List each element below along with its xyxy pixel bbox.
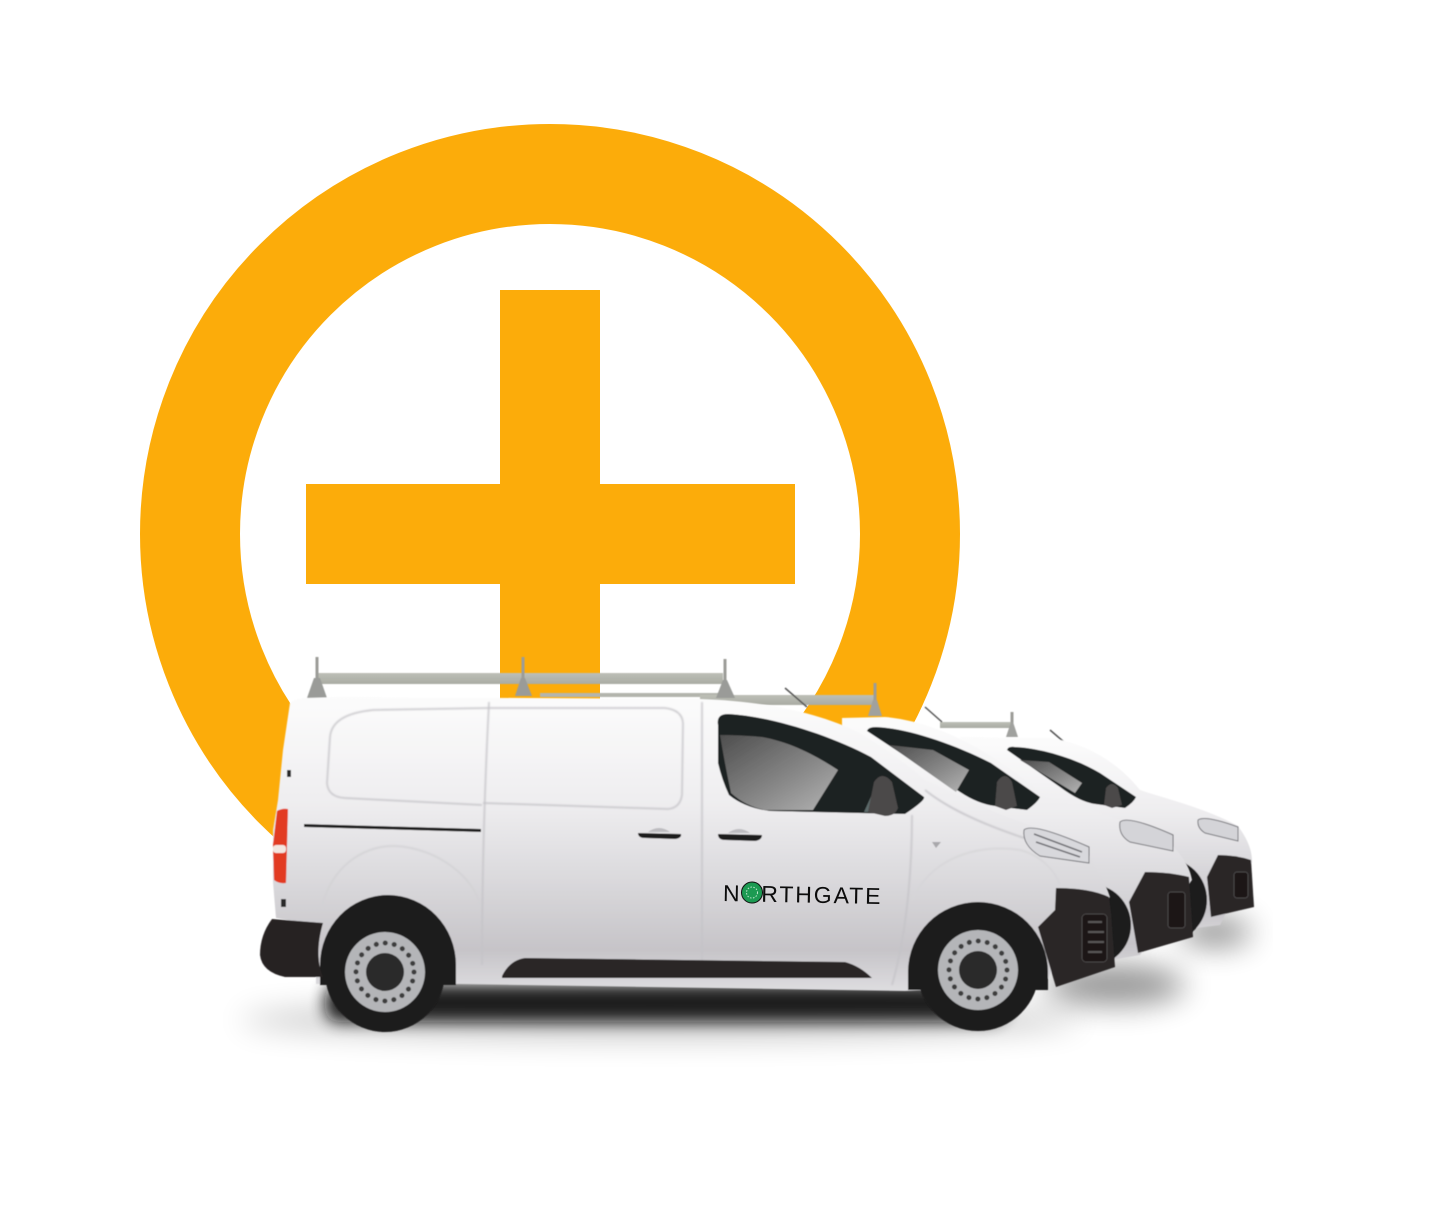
body bbox=[273, 697, 1110, 991]
tail light bbox=[273, 809, 288, 883]
window bbox=[718, 714, 924, 814]
icon: orange circled plus bbox=[190, 174, 910, 894]
grille bbox=[1234, 872, 1248, 898]
front wheel bbox=[917, 909, 1039, 1031]
bumper bbox=[1129, 872, 1193, 953]
rear bumper bbox=[260, 919, 323, 977]
door handles bbox=[638, 828, 762, 841]
headlight bbox=[1120, 820, 1173, 851]
body bbox=[842, 717, 1192, 980]
roof rack bbox=[540, 683, 882, 716]
roof rack bbox=[925, 707, 1064, 742]
window bbox=[1007, 747, 1136, 808]
mirror bbox=[1104, 784, 1122, 808]
van: rear of fleet bbox=[925, 707, 1254, 942]
wing mirror housing bbox=[868, 776, 898, 816]
front bumper bbox=[1038, 888, 1115, 987]
panel lines bbox=[322, 702, 1060, 985]
rear wheel bbox=[325, 912, 445, 1032]
van: front of fleet bbox=[260, 657, 1115, 1032]
plus sign bbox=[306, 290, 795, 760]
rear side strip bbox=[304, 824, 481, 832]
headlight bbox=[1024, 828, 1089, 863]
ring bbox=[190, 174, 910, 894]
logo: NORTHGATE: NORTHGATE bbox=[723, 880, 883, 909]
glass bbox=[889, 745, 969, 792]
grille bbox=[1082, 914, 1107, 962]
bumper bbox=[1207, 855, 1254, 917]
mirror bbox=[995, 776, 1017, 810]
logo emblem bbox=[741, 882, 763, 903]
body bbox=[960, 737, 1252, 940]
side lens bbox=[932, 842, 941, 848]
glass bbox=[1020, 760, 1082, 793]
grille bbox=[1168, 892, 1185, 928]
rear wheel arch bbox=[320, 895, 456, 985]
ground shadow bbox=[240, 918, 1251, 1038]
window bbox=[867, 727, 1040, 810]
front wheel arch bbox=[908, 902, 1048, 990]
van: middle of fleet bbox=[540, 683, 1193, 980]
mirror bbox=[864, 790, 880, 812]
headlight bbox=[1198, 819, 1238, 841]
roof rack bbox=[307, 657, 735, 698]
front wheel bbox=[1123, 858, 1207, 942]
side sill trim bbox=[502, 958, 872, 978]
glass bbox=[720, 735, 838, 810]
front wheel bbox=[1049, 884, 1131, 966]
rear door catches bbox=[281, 770, 291, 907]
